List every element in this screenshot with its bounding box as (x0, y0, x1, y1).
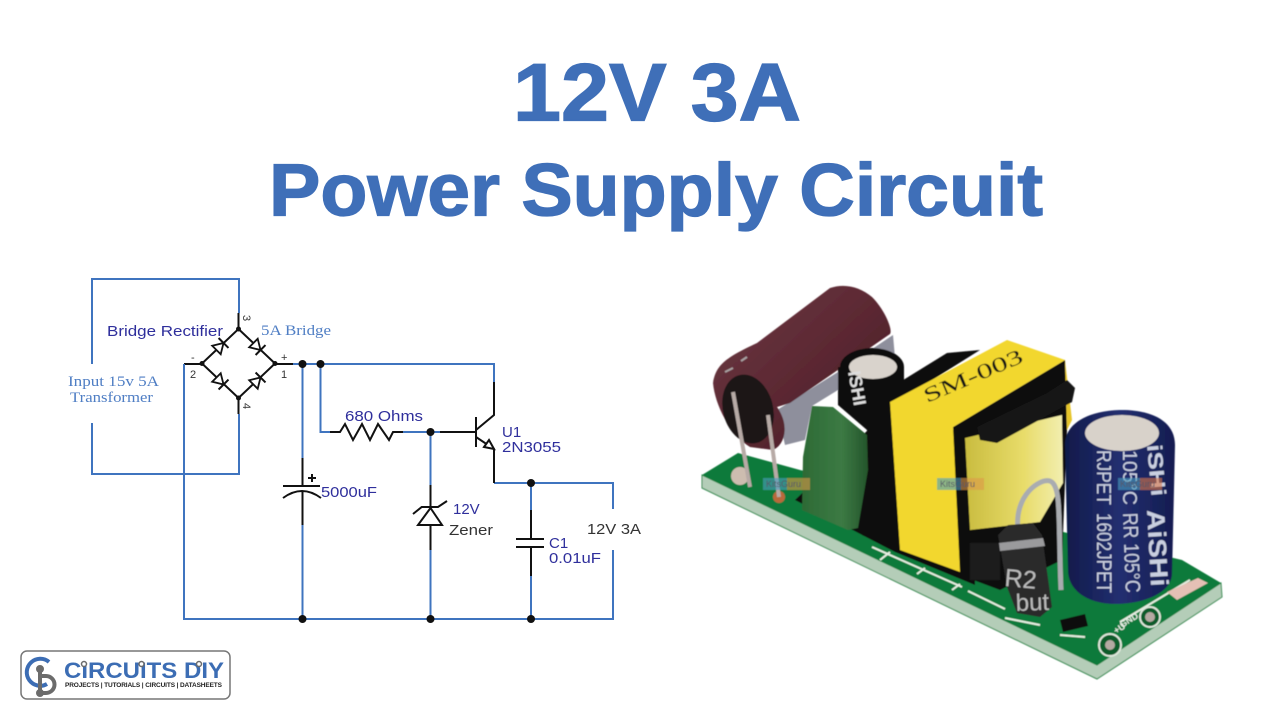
title (269, 48, 1043, 232)
circuit schematic (68, 279, 641, 623)
pin labels (190, 315, 287, 409)
schematic labels: 12V (453, 501, 480, 518)
schematic labels: 12V 3A (587, 521, 641, 538)
schematic labels: Bridge Rectifier (107, 323, 223, 340)
schematic labels: C1 (549, 535, 568, 552)
schematic labels: 5A Bridge (261, 323, 331, 339)
transformer rear clip (887, 350, 980, 402)
smd parts: GND (1118, 610, 1140, 630)
transformer yellow shell (890, 340, 1065, 572)
bridge rectifier (184, 313, 293, 414)
watermarks: KitsGuru (940, 479, 975, 489)
blue electrolytic capacitor: iSHi (1142, 443, 1169, 497)
schematic labels: 0.01uF (549, 550, 601, 567)
schematic labels: 5000uF (321, 484, 377, 501)
small black capacitor (838, 348, 904, 550)
zener diode (413, 485, 447, 550)
junction dots (298, 360, 535, 623)
rectifier diode: R2 (1003, 564, 1038, 595)
pin labels: 4 (240, 403, 252, 409)
transistor (440, 382, 494, 483)
pin labels: - (191, 352, 195, 364)
smd parts (1060, 578, 1208, 636)
blue electrolytic capacitor: 105°C (1118, 450, 1140, 505)
main wires (184, 364, 613, 619)
logo icon (27, 659, 54, 695)
schematic labels: 680 Ohms (345, 408, 423, 425)
logo wordmark: CIRCUITS DIY (64, 658, 224, 683)
transformer input wiring (92, 279, 239, 474)
title: 12V 3A (513, 48, 801, 138)
capacitor C1 (516, 510, 544, 576)
pin labels: 1 (281, 369, 287, 381)
pin labels: + (281, 352, 287, 364)
schematic labels: Zener (449, 522, 493, 539)
rectifier diode: but (1015, 589, 1050, 617)
schematic labels: Input 15v 5A (68, 374, 159, 390)
transformer coil (965, 415, 1063, 530)
schematic labels: 2N3055 (502, 439, 561, 456)
rectifier diode (998, 481, 1061, 617)
schematic labels: U1 (502, 424, 521, 441)
transformer (887, 340, 1075, 590)
diode: bottom left (212, 373, 228, 389)
watermarks (763, 478, 1162, 490)
title: Power Supply Circuit (269, 148, 1043, 232)
blue electrolytic capacitor: RR 105°C (1118, 512, 1144, 593)
pcb board (702, 430, 1222, 679)
pin labels: 2 (190, 369, 196, 381)
logo: Circuits DIY (21, 651, 230, 699)
small black capacitor: ISHI (844, 369, 870, 407)
diode: top left (212, 338, 228, 355)
resistor (330, 424, 403, 440)
transformer yellow side strip (1065, 360, 1072, 430)
watermarks: KitsGuru (766, 479, 801, 489)
transformer black bobbin clip (977, 380, 1075, 443)
transformer black frame (953, 360, 1067, 590)
transformer label: SM-003 (920, 344, 1027, 408)
green film capacitor (802, 406, 868, 530)
schematic labels: Transformer (70, 390, 153, 406)
logo tagline: PROJECTS | TUTORIALS | CIRCUITS | DATASHEETS (65, 682, 223, 689)
capacitor 5000uF (283, 458, 321, 525)
pin labels: 3 (240, 315, 252, 321)
logo wordmark pins (82, 662, 202, 666)
blue electrolytic capacitor: 1602JPET (1092, 513, 1115, 593)
blue electrolytic capacitor: AiSHi (1141, 509, 1173, 587)
schematic labels (68, 323, 641, 567)
transistor under coil (970, 543, 1000, 580)
blue electrolytic capacitor: RJPET (1092, 450, 1114, 505)
photo: power supply module (702, 286, 1222, 679)
diode: top right (249, 338, 265, 355)
diode: bottom right (249, 373, 265, 389)
watermarks: KitsGuru (1120, 479, 1155, 489)
smd parts: +U (1112, 621, 1127, 636)
blue electrolytic capacitor (1065, 410, 1175, 604)
large brown capacitor (713, 286, 895, 497)
